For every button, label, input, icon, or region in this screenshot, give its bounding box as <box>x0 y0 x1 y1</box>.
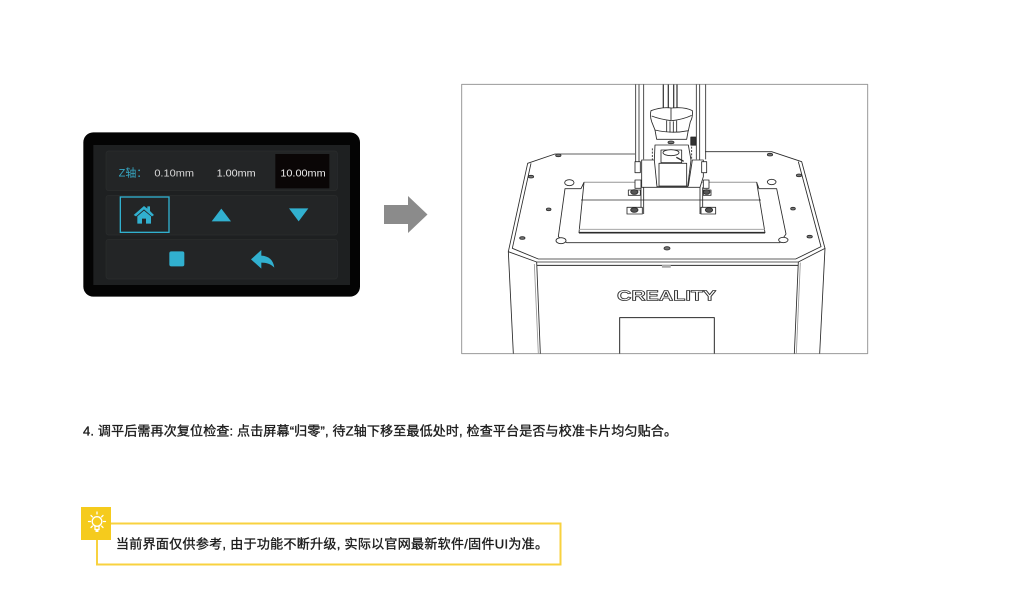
screw holes <box>520 153 812 250</box>
clamp feet and screws <box>627 190 716 214</box>
home and up down buttons row <box>106 195 337 235</box>
stop and back buttons row <box>106 239 337 279</box>
z-axis column and clamp <box>627 84 716 214</box>
Z axis step row: 0.10mm <box>154 168 194 179</box>
Z axis step row <box>106 151 337 191</box>
front seam tab <box>662 265 670 267</box>
Z axis step row: 10.00mm <box>280 168 326 179</box>
resin vat and build plate <box>556 179 788 244</box>
callout: note <box>81 507 560 564</box>
top plate outline <box>508 152 825 354</box>
Z axis step row: Z轴： <box>119 166 147 180</box>
panel: printer line drawing <box>462 84 868 354</box>
knob <box>655 130 688 139</box>
callout text: 当前界面仅供参考, 由于功能不断升级, 实际以官网最新软件/固件UI为准。 <box>116 536 548 552</box>
callout border <box>97 524 560 564</box>
logo: CREALITY: CREALITY <box>617 288 716 305</box>
Z axis step row: 1.00mm <box>217 168 256 179</box>
icon: light bulb <box>81 507 111 540</box>
panel: touch screen interface <box>83 132 360 297</box>
arrow: gray right arrow <box>384 196 428 233</box>
text block: step 4 instruction: 4. 调平后需再次复位检查: 点击屏幕“归零”, 待Z轴下移至最低处时, 检查平台是否与校准卡片均匀贴合。 <box>83 424 677 438</box>
front window <box>620 318 714 354</box>
